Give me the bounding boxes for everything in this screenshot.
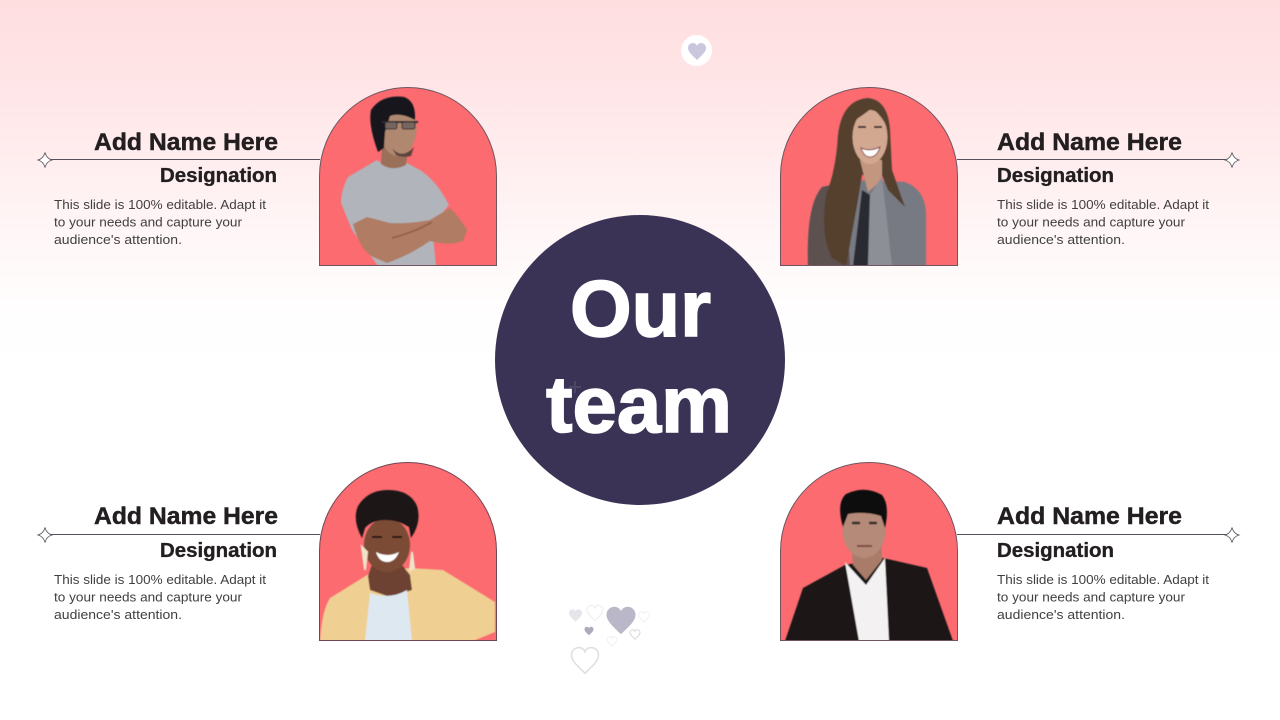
name: Add Name Here <box>997 129 1182 156</box>
portrait arch: woman in yellow blazer <box>320 462 496 641</box>
name: Add Name Here <box>997 503 1182 530</box>
designation: Designation <box>160 540 277 562</box>
designation: Designation <box>997 540 1114 562</box>
connector line with star <box>38 152 320 168</box>
portrait arch: woman in grey blazer <box>780 88 958 266</box>
icon: cluster of hearts <box>569 605 650 673</box>
name: Add Name Here <box>94 129 278 156</box>
connector line with star <box>957 528 1239 542</box>
portrait arch: man in grey t-shirt <box>320 88 496 266</box>
description: audience's attention. <box>997 607 1125 622</box>
description <box>54 572 266 622</box>
panel: team member top right <box>780 88 1239 266</box>
designation: Designation <box>160 165 277 187</box>
designation: Designation <box>997 165 1114 187</box>
name: Add Name Here <box>94 503 278 530</box>
description: to your needs and capture your <box>997 214 1186 230</box>
title: team <box>546 360 732 449</box>
description: to your needs and capture your <box>54 214 243 230</box>
description <box>997 572 1209 622</box>
description: to your needs and capture your <box>997 590 1186 604</box>
description: This slide is 100% editable. Adapt it <box>997 197 1209 212</box>
description: This slide is 100% editable. Adapt it <box>54 197 266 212</box>
panel: team member top left <box>38 88 496 266</box>
panel: team member bottom right <box>780 462 1239 641</box>
connector line with star <box>957 152 1239 168</box>
description: This slide is 100% editable. Adapt it <box>997 572 1209 587</box>
icon: faint plus <box>569 381 581 393</box>
description: audience's attention. <box>54 607 182 622</box>
description <box>997 197 1209 247</box>
description: to your needs and capture your <box>54 590 243 604</box>
description: audience's attention. <box>54 232 182 247</box>
icon: heart badge <box>681 35 712 66</box>
title: Our <box>570 264 711 353</box>
description <box>54 197 266 247</box>
panel: team member bottom left <box>38 462 496 641</box>
title <box>546 264 732 449</box>
description: This slide is 100% editable. Adapt it <box>54 572 266 587</box>
description: audience's attention. <box>997 232 1125 247</box>
connector line with star <box>38 528 320 542</box>
center circle with title <box>495 215 785 505</box>
portrait arch: man in black suit <box>780 462 958 641</box>
